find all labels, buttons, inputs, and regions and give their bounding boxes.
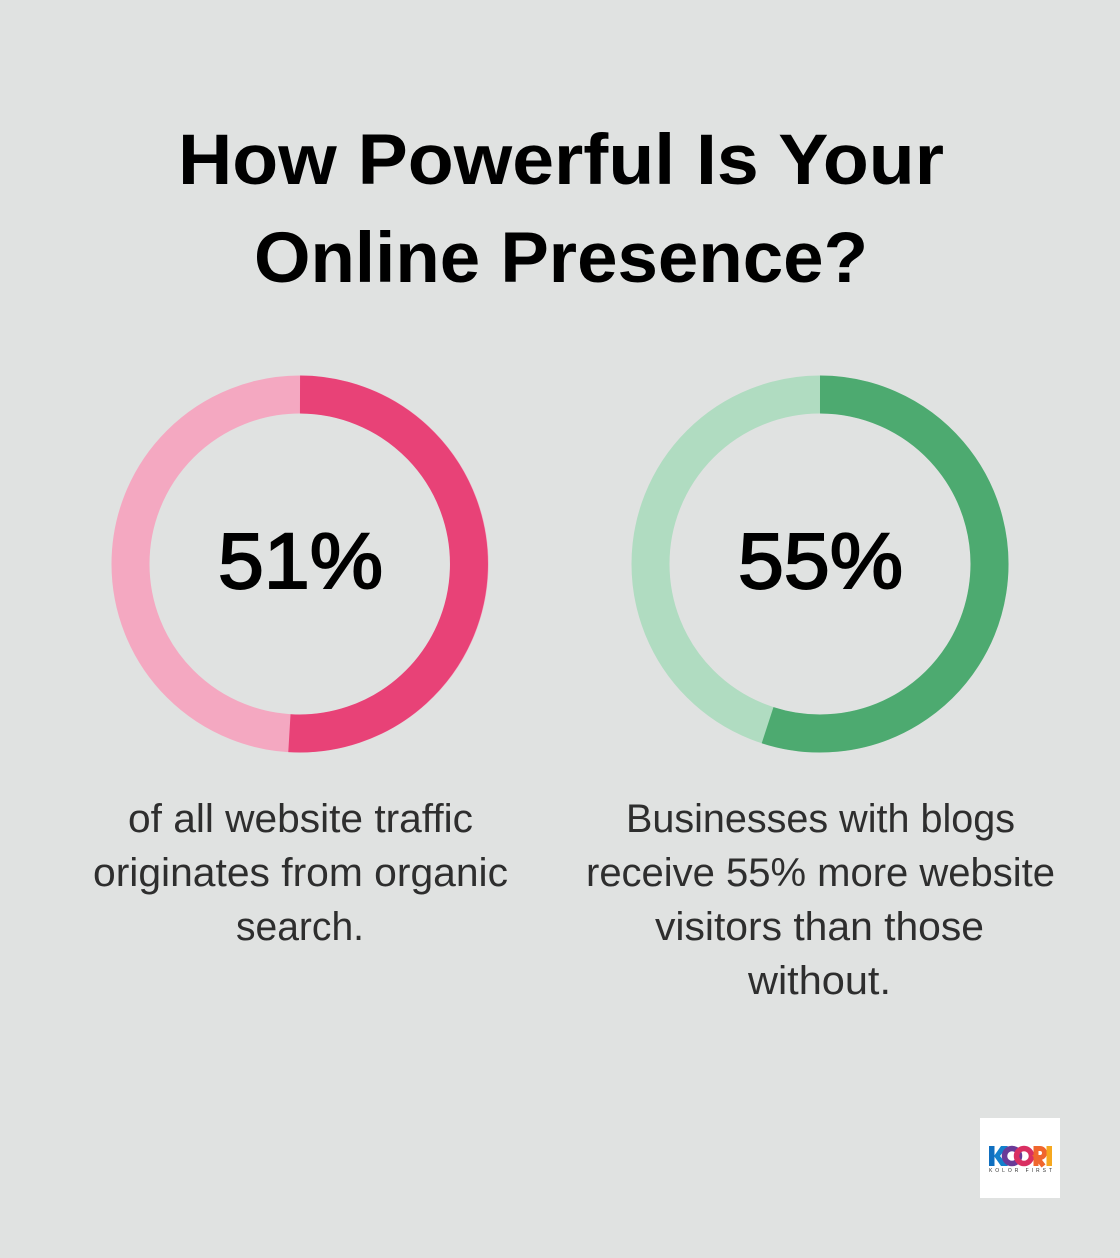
stat: 55%: 55% [738,516,903,605]
stat: 51%: 51% [218,516,383,605]
description: blogs: without. [747,959,891,1003]
logo mark [989,1146,1052,1166]
description: organic search: of all website traffic [128,797,473,841]
donut chart: 55% [650,394,990,734]
description: blogs: visitors than those [655,905,984,949]
logo tagline: KOLOR FIRST [989,1168,1052,1174]
title [178,121,944,298]
description: organic search: search. [236,905,364,949]
description: organic search: originates from organic [93,851,508,895]
description: organic search [93,797,508,949]
donut chart: 51% [130,394,470,734]
description: blogs [586,797,1055,1003]
title: Online Presence? [254,219,868,298]
logo: KOOR1 Kolor First [980,1118,1060,1198]
panel: 55% blogs [586,394,1055,1003]
description: blogs: receive 55% more website [586,851,1055,895]
title: How Powerful Is Your [178,121,944,200]
panel: 51% organic search [93,394,508,949]
description: blogs: Businesses with blogs [626,797,1015,841]
